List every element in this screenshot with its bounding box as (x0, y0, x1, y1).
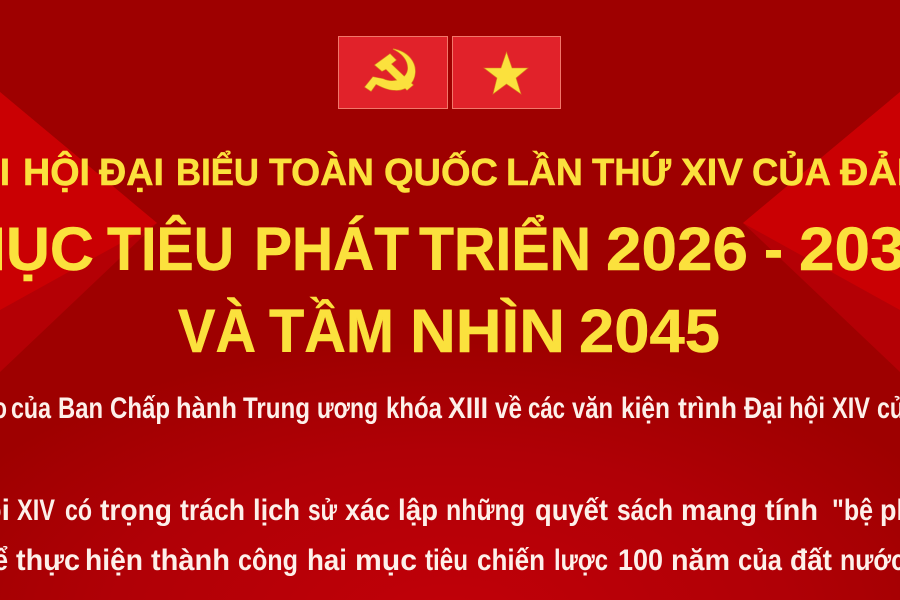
text: report source line: ương (317, 392, 378, 425)
icon: yellow star (484, 52, 528, 94)
text: strategic goals line: thành (151, 544, 230, 577)
text: congress responsibility line: quyết (535, 494, 608, 527)
heading: congress name: TOÀN (269, 150, 374, 194)
text: strategic goals line: công (238, 544, 298, 577)
heading: congress name (0, 149, 900, 194)
heading: congress name: THỨ (592, 150, 671, 194)
text: strategic goals line: hai (307, 544, 347, 577)
title: development goals line one: - (764, 215, 783, 283)
icon: national flag with star (452, 36, 560, 108)
text: congress responsibility line: trách (180, 494, 245, 527)
text: congress responsibility line: mang (681, 494, 757, 527)
heading: congress name: CỦA (752, 150, 831, 194)
text: report source line: Đại (744, 392, 783, 425)
text: strategic goals line: tiêu (425, 544, 468, 577)
text: congress responsibility line: "bệ (832, 494, 873, 527)
text: report source line: văn (572, 392, 613, 425)
text: report source line: các (528, 392, 565, 425)
title: development goals line one: PHÁT (254, 215, 409, 283)
text: congress responsibility line: có (65, 494, 92, 527)
text: strategic goals line: mục (355, 544, 417, 577)
text: congress responsibility line: sử (308, 494, 337, 527)
decorative right triangle (743, 92, 900, 372)
text: congress responsibility line: những (446, 494, 525, 527)
title: development goals line one: TIÊU (107, 215, 234, 283)
text: congress responsibility line: lập (398, 494, 438, 527)
icon: hammer and sickle (365, 49, 415, 91)
title: vision line two: 2045 (579, 297, 720, 365)
text: congress responsibility line: xác (345, 494, 390, 527)
text: report source line: XIII (448, 392, 488, 425)
text: congress responsibility line (0, 494, 900, 527)
heading: congress name: QUỐC (384, 149, 498, 194)
text: strategic goals line: chiến (477, 544, 545, 577)
text: strategic goals line: lược (554, 544, 608, 577)
text: congress responsibility line: trọng (100, 494, 172, 527)
title: vision line two (178, 297, 720, 365)
icon: Party flag with hammer and sickle (338, 36, 448, 108)
heading: congress name: XIV (681, 152, 744, 194)
text: strategic goals line: năm (671, 544, 730, 577)
text: report source line: XIV (832, 392, 870, 425)
decorative left triangle (0, 92, 157, 372)
text: report source line: của (11, 392, 51, 425)
text: strategic goals line: hiện (85, 544, 143, 577)
text: congress responsibility line: XIV (17, 494, 55, 527)
text: congress responsibility line: sách (617, 494, 673, 527)
text: report source line: hội (789, 392, 825, 425)
title: vision line two: NHÌN (410, 297, 565, 365)
text: report source line: Chấp (110, 392, 170, 425)
heading: congress name: HỘI (23, 149, 90, 194)
heading: congress name: BIỂU (176, 149, 259, 194)
text: strategic goals line: thực (16, 544, 80, 577)
heading: congress name: ĐẠI (99, 152, 164, 194)
text: strategic goals line: của (738, 544, 782, 577)
text: report source line: về (495, 392, 522, 425)
text: report source line: Trung (243, 392, 310, 425)
text: report source line: hành (176, 392, 237, 425)
text: report source line: kiện (621, 392, 670, 425)
title: development goals line one: TRIỂN (419, 215, 591, 283)
text: strategic goals line: 100 (618, 544, 663, 577)
title: vision line two: VÀ (178, 297, 256, 365)
text: congress responsibility line: tính (765, 494, 818, 527)
text: report source line: trình (678, 392, 737, 425)
text: strategic goals line (0, 544, 900, 577)
title: development goals line one: 2026 (606, 215, 748, 283)
title: development goals line one (0, 215, 900, 283)
text: report source line (0, 392, 900, 425)
text: report source line: khóa (386, 392, 442, 425)
text: congress responsibility line: lịch (253, 494, 300, 527)
heading: congress name: LẦN (506, 150, 583, 194)
text: strategic goals line: đất (790, 544, 832, 577)
title: vision line two: TẦM (269, 297, 394, 365)
text: report source line: Ban (58, 392, 103, 425)
